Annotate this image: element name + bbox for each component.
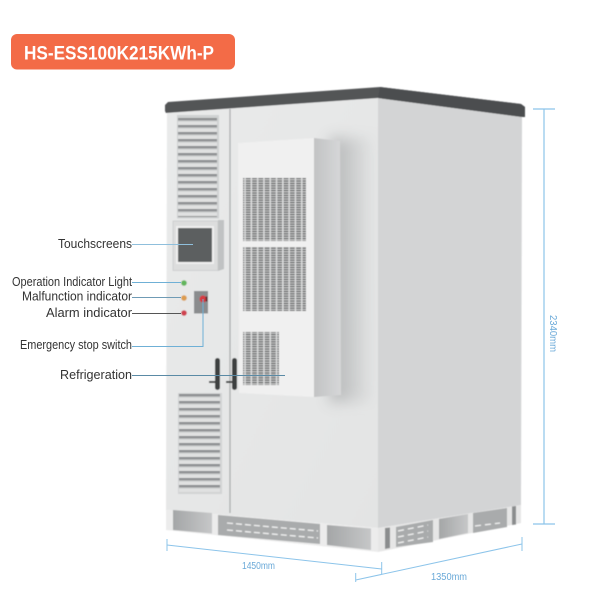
air conditioner unit (238, 138, 341, 397)
cabinet side panel (378, 98, 522, 528)
door handle left (209, 358, 220, 390)
upper louver (177, 115, 219, 218)
dimension: width 1450mm (167, 539, 382, 574)
label: Emergency stop switch: Emergency stop switch (20, 338, 132, 352)
dimension: width 1450mm: 1450mm (242, 561, 275, 572)
AC shadow (330, 138, 376, 402)
label: Alarm indicator (46, 306, 181, 320)
touchscreen (173, 220, 224, 271)
emergency stop switch (194, 291, 208, 314)
label: Operation Indicator Light: Operation Indicator Light (12, 275, 132, 289)
cabinet front panel (166, 98, 378, 528)
label: Touchscreens: Touchscreens (58, 237, 132, 251)
energy storage cabinet (165, 87, 525, 552)
title badge: HS-ESS100K215KWh-P (24, 44, 214, 64)
label: Malfunction indicator: Malfunction indicator (22, 290, 132, 304)
title badge (11, 34, 235, 70)
vent middle (243, 247, 306, 311)
dimension: depth 1350mm (356, 537, 522, 583)
indicator light: green (181, 280, 187, 286)
indicator light: orange (181, 295, 187, 301)
vent upper (243, 178, 306, 241)
vent lower (243, 332, 279, 385)
door seam (229, 109, 231, 513)
base frame (166, 505, 521, 552)
label: Touchscreens (58, 237, 193, 251)
lower louver (178, 393, 222, 494)
dimension: height 2340mm: 2340mm (547, 315, 558, 352)
roof (165, 87, 525, 117)
label: Emergency stop switch (20, 299, 203, 352)
indicator light: red (181, 310, 187, 316)
label: Refrigeration: Refrigeration (60, 368, 132, 382)
dimension: depth 1350mm: 1350mm (431, 572, 467, 583)
door handle right (226, 358, 237, 390)
label: Alarm indicator: Alarm indicator (46, 306, 132, 320)
